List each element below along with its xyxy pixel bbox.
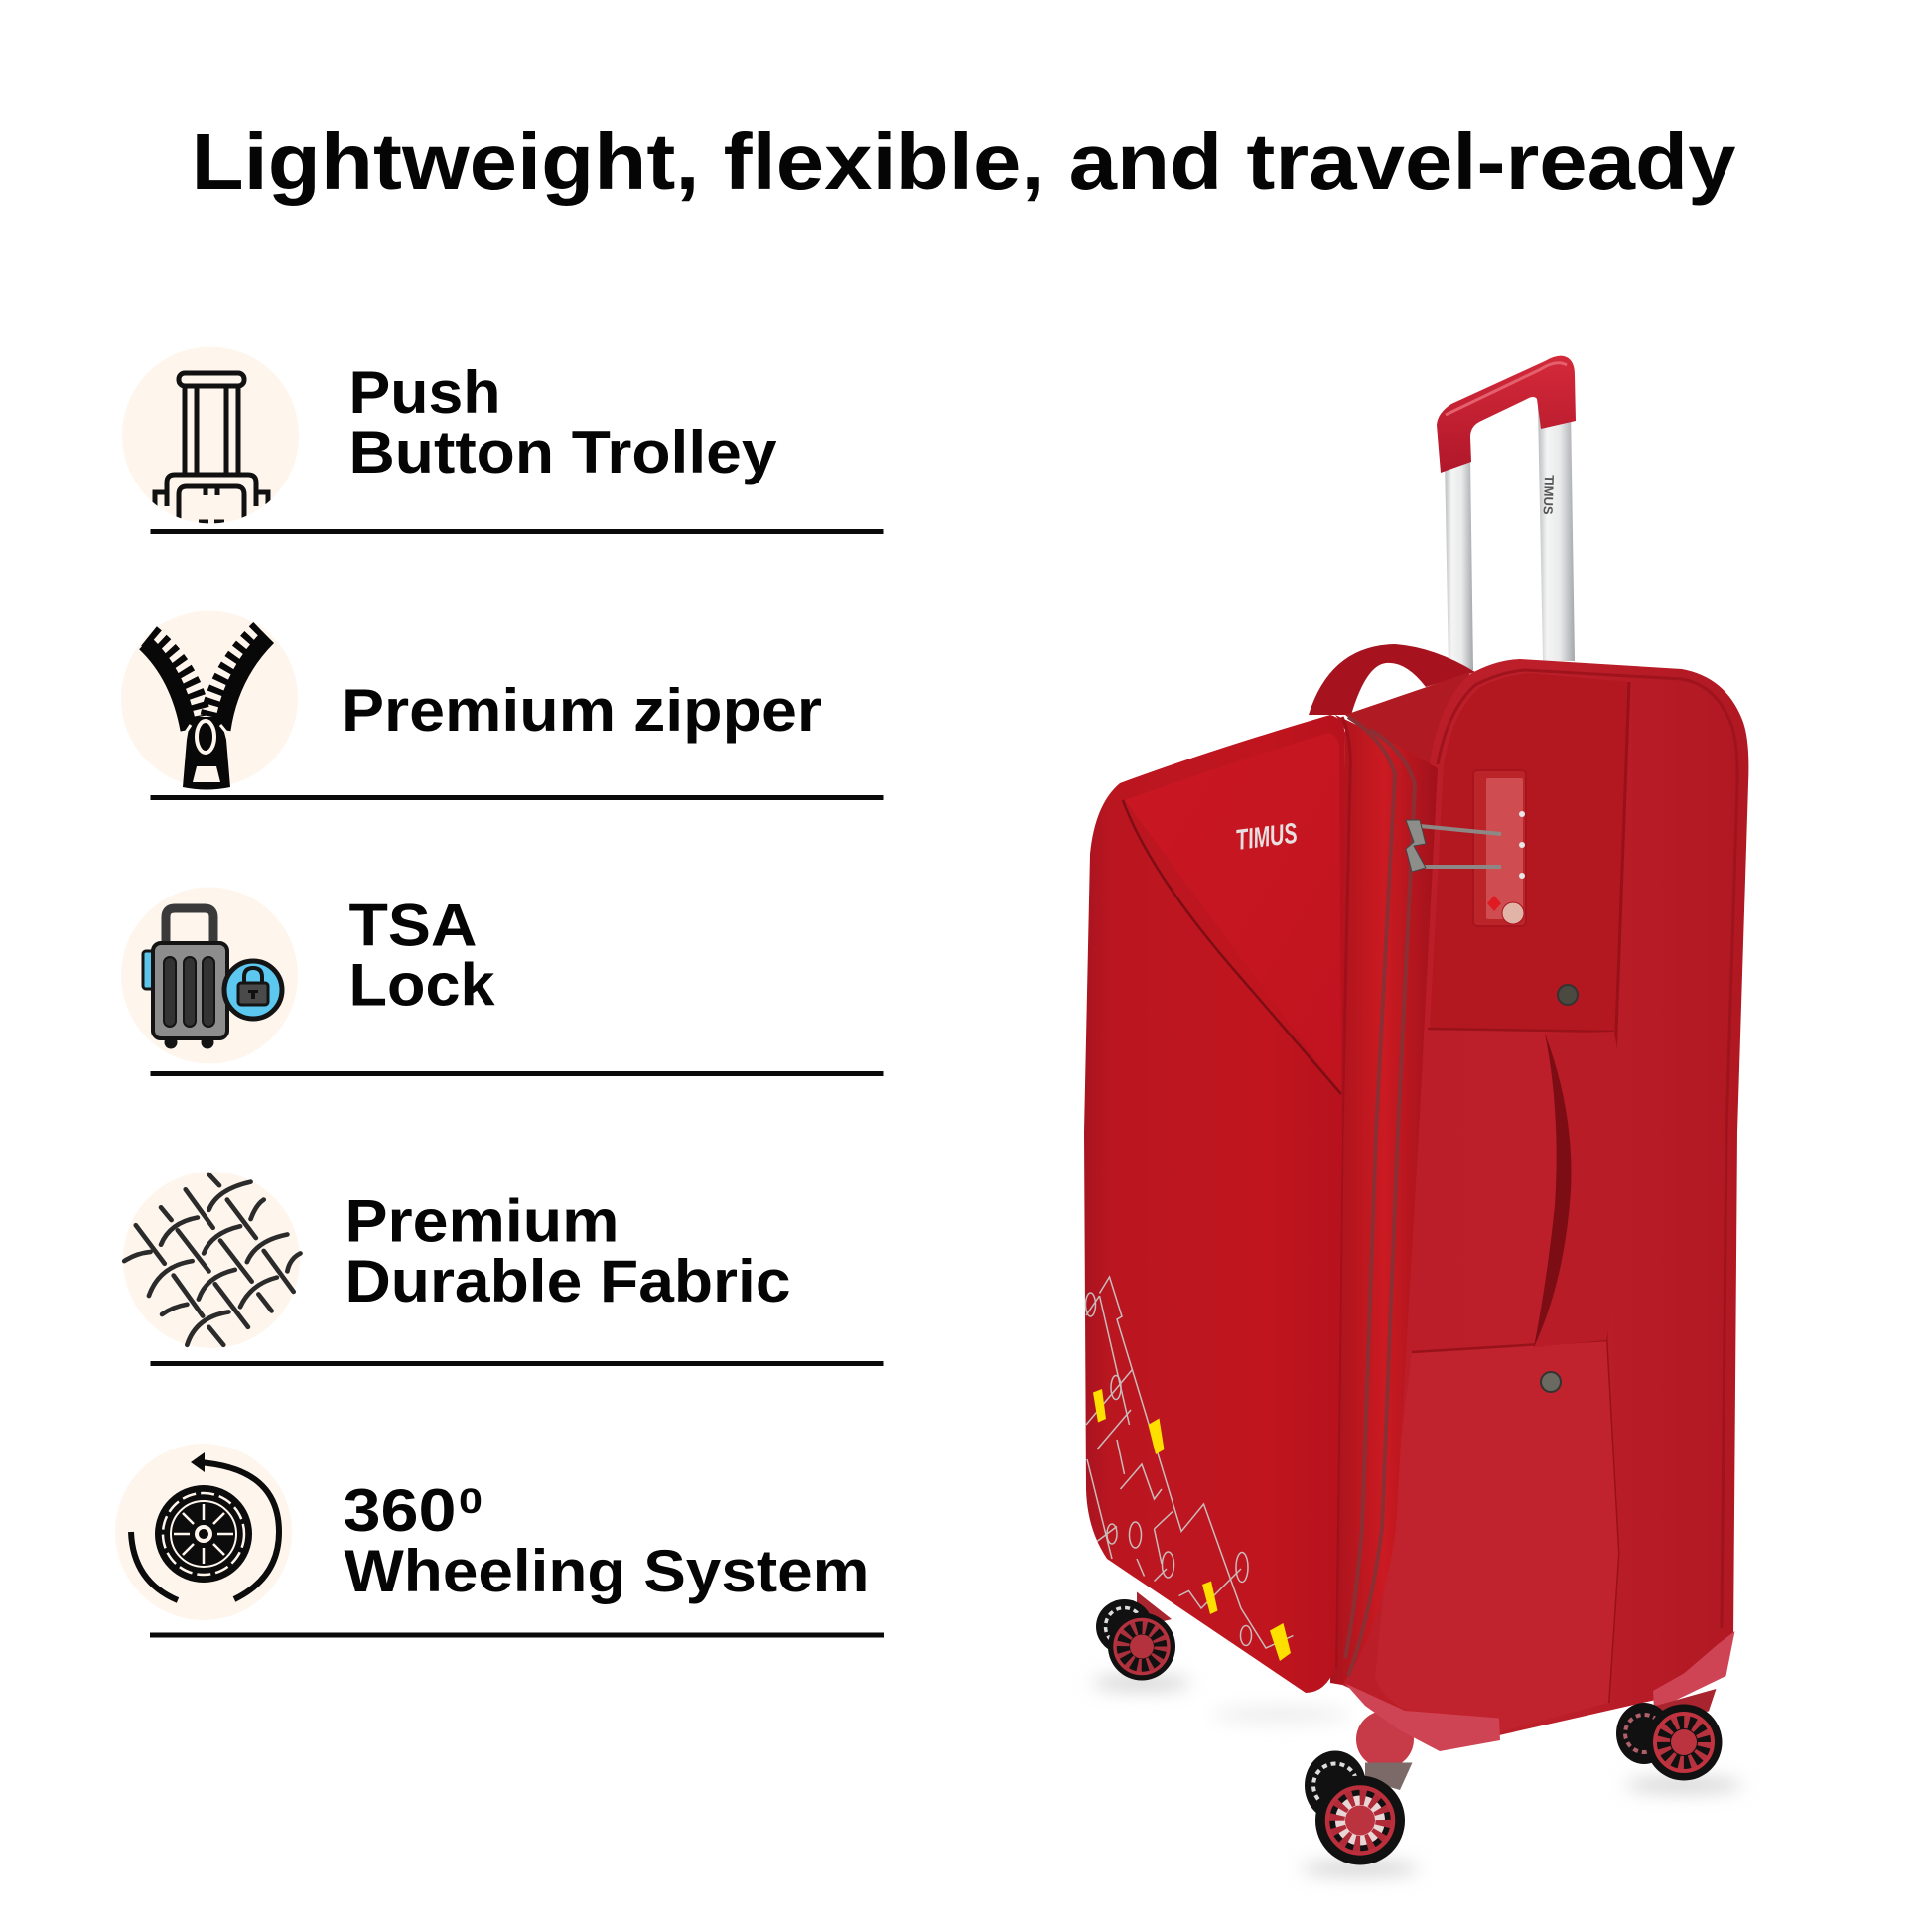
red grip [1437, 356, 1576, 473]
carry handle on top [1309, 644, 1475, 715]
icon: trolley [122, 347, 299, 526]
corner guard: right [1653, 1631, 1735, 1711]
front panel [1084, 715, 1345, 1693]
wheels and corner guards [1096, 1592, 1735, 1864]
title: Lightweight, flexible, and travel-ready [191, 117, 1736, 206]
side panel [1342, 659, 1748, 1735]
lock face [1486, 778, 1523, 919]
label: 360 degree Wheeling System: Wheeling System [344, 1538, 870, 1604]
divider [151, 795, 884, 800]
feature: premium durable fabric [123, 1172, 884, 1366]
feature list [115, 347, 884, 1638]
dials [1519, 811, 1525, 879]
label: Push Button Trolley: Push [349, 359, 500, 426]
aluminium tubes [1445, 407, 1575, 670]
wheel: rear right [1616, 1689, 1722, 1781]
infographic canvas [115, 131, 1749, 1884]
label: TSA Lock [349, 892, 495, 1019]
divider [151, 1361, 884, 1366]
label: TSA Lock: Lock [349, 951, 495, 1019]
gusset with zippers [1330, 715, 1438, 1685]
label: 360 degree Wheeling System [344, 1477, 870, 1604]
corner guard: centre [1345, 1684, 1500, 1790]
side body [1342, 659, 1748, 1735]
label: Push Button Trolley: Button Trolley [349, 419, 777, 485]
darker upper panel [1430, 673, 1629, 1032]
lock body [1473, 770, 1526, 926]
diagonal seam [1123, 800, 1341, 1094]
icon: rotating wheel [115, 1444, 292, 1620]
floor shadows [1092, 1676, 1743, 1875]
zipper pulls and wires [1406, 820, 1501, 872]
pocket top seam [1428, 1029, 1614, 1032]
feature: 360 wheeling system [115, 1444, 884, 1638]
rivet lower [1541, 1372, 1561, 1392]
rivet upper [1558, 985, 1578, 1005]
yellow tags [1093, 1389, 1291, 1661]
lower pocket shading [1375, 1340, 1618, 1732]
pocket bottom seam [1412, 1340, 1606, 1352]
wheel: front centre [1305, 1751, 1405, 1864]
grip highlight [1446, 363, 1567, 415]
label: Premium Durable Fabric: Premium [345, 1187, 620, 1255]
side carry strap [1534, 1032, 1626, 1347]
icon: zipper [121, 610, 298, 790]
divider [151, 529, 884, 534]
strap slit [1534, 1034, 1571, 1347]
label: Premium Durable Fabric: Durable Fabric [345, 1248, 790, 1314]
label: 360 degree Wheeling System: 360 [344, 1477, 457, 1544]
divider [150, 1632, 884, 1638]
upper face above the diagonal seam [1125, 733, 1341, 1094]
handle label: TIMUS [1541, 475, 1557, 515]
border stitching [1438, 670, 1737, 1628]
TSA combination lock [1473, 770, 1526, 926]
seam [1336, 717, 1350, 1668]
front body [1084, 715, 1345, 1693]
suitcase product illustration [1084, 356, 1748, 1875]
divider [151, 1071, 884, 1076]
feature: push button trolley [122, 347, 884, 534]
zipper lines [1345, 717, 1395, 1658]
feature: TSA lock [121, 888, 884, 1076]
brand logo: TIMUS [1234, 818, 1300, 857]
wheel: rear left [1096, 1592, 1175, 1680]
key cylinder [1502, 902, 1524, 924]
label: TSA Lock: TSA [349, 892, 477, 959]
label: 360 degree Wheeling System: 0 [459, 1482, 483, 1521]
TSA mark [1487, 896, 1501, 911]
telescopic trolley handle [1437, 356, 1576, 670]
panel seam [1606, 682, 1629, 1703]
feature: premium zipper [121, 610, 884, 800]
label: Premium zipper: Premium zipper [342, 677, 822, 744]
top surface [1345, 672, 1470, 784]
icon: luggage with lock [121, 888, 298, 1064]
label: Premium Durable Fabric [345, 1187, 790, 1314]
icon: woven fabric [123, 1172, 301, 1348]
label: Push Button Trolley [349, 359, 777, 485]
circuit line pattern on front panel [1086, 1277, 1293, 1661]
